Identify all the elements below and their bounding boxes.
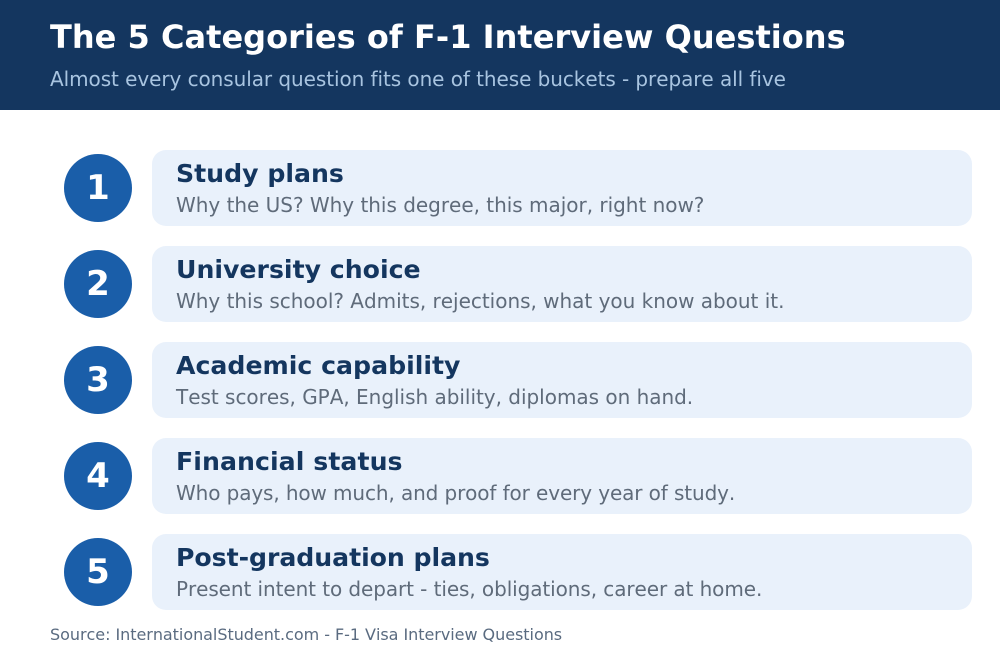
- card 4: Financial status: [176, 447, 403, 476]
- category 1: study plans: [64, 150, 972, 226]
- card 1: Why the US? Why this degree, this major, right now?: [176, 193, 704, 217]
- number badge 2: 2: [86, 264, 110, 304]
- title: The 5 Categories of F-1 Interview Questions: [50, 18, 846, 56]
- card 4: Who pays, how much, and proof for every year of study.: [176, 481, 735, 505]
- card 3: Academic capability: [176, 351, 460, 380]
- number badge 4: [64, 442, 132, 510]
- category 2: university choice: [64, 246, 972, 322]
- card 4: [152, 438, 972, 514]
- card 3: Test scores, GPA, English ability, diplomas on hand.: [176, 385, 693, 409]
- card 3: [152, 342, 972, 418]
- subtitle: Almost every consular question fits one of these buckets - prepare all five: [50, 67, 786, 91]
- number badge 3: 3: [86, 360, 110, 400]
- card 5: Post-graduation plans: [176, 543, 490, 572]
- card 5: [152, 534, 972, 610]
- number badge 4: 4: [86, 456, 110, 496]
- card 2: University choice: [176, 255, 421, 284]
- card 2: Why this school? Admits, rejections, what you know about it.: [176, 289, 784, 313]
- header banner: [0, 0, 1000, 110]
- card 5: Present intent to depart - ties, obligations, career at home.: [176, 577, 762, 601]
- card 2: [152, 246, 972, 322]
- number badge 1: [64, 154, 132, 222]
- card 1: [152, 150, 972, 226]
- number badge 5: 5: [86, 552, 110, 592]
- category 5: post-graduation plans: [64, 534, 972, 610]
- number badge 1: 1: [86, 168, 110, 208]
- category 3: academic capability: [64, 342, 972, 418]
- number badge 2: [64, 250, 132, 318]
- source line: Source: InternationalStudent.com - F-1 Visa Interview Questions: [50, 625, 562, 644]
- number badge 5: [64, 538, 132, 606]
- category 4: financial status: [64, 438, 972, 514]
- card 1: Study plans: [176, 159, 344, 188]
- number badge 3: [64, 346, 132, 414]
